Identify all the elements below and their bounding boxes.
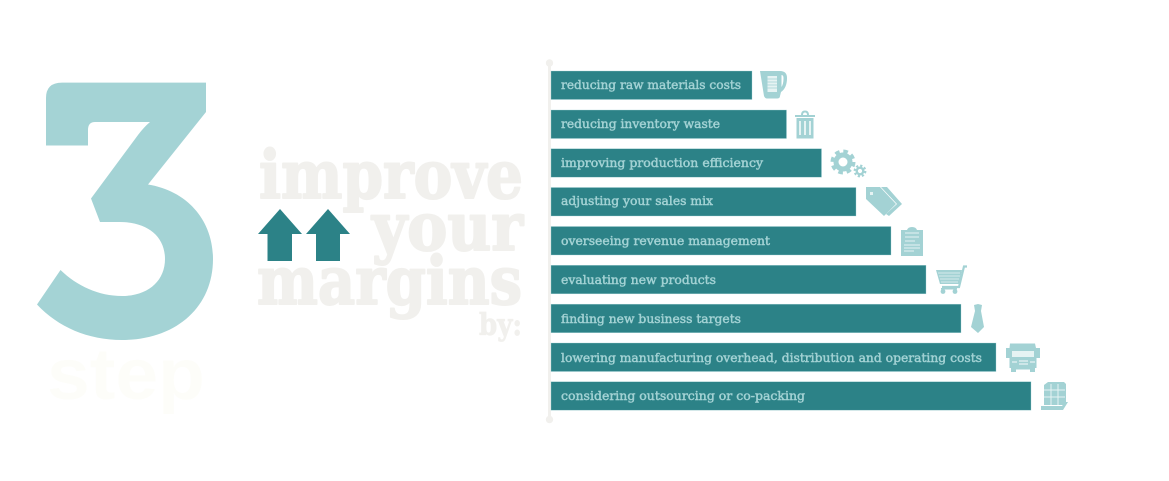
bar: adjusting your sales mix: adjusting your sales mix <box>561 194 713 208</box>
bar: considering outsourcing or co-packing <box>551 382 1031 410</box>
bar: reducing inventory waste <box>551 110 786 138</box>
heading: improve your margins by: improve <box>259 136 523 214</box>
bar: lowering manufacturing overhead, distribution and operating costs <box>551 343 996 372</box>
bar: reducing raw materials costs <box>551 71 752 100</box>
bar: overseeing revenue management <box>551 226 891 255</box>
icon: pitcher <box>760 71 787 98</box>
bar: adjusting your sales mix <box>551 188 856 216</box>
bar: lowering manufacturing overhead, distribution and operating costs: lowering manufacturing overhead, distribution and operating costs <box>561 351 982 365</box>
bar: overseeing revenue management: overseeing revenue management <box>561 234 770 248</box>
big numeral 3 <box>37 83 213 340</box>
word: step: step <box>47 335 205 415</box>
bar: evaluating new products <box>551 265 926 294</box>
timeline spine <box>546 59 553 423</box>
icon: delivery truck <box>1006 344 1040 372</box>
icon: gears <box>832 152 865 176</box>
bar: reducing inventory waste: reducing inventory waste <box>561 117 720 131</box>
icon: double up arrows <box>258 209 350 261</box>
bar: improving production efficiency: improving production efficiency <box>561 156 763 170</box>
bar: finding new business targets <box>551 304 961 333</box>
bar: evaluating new products: evaluating new products <box>561 273 716 287</box>
bar: reducing raw materials costs: reducing raw materials costs <box>561 78 741 92</box>
icon: necktie <box>971 304 984 333</box>
bar: finding new business targets: finding new business targets <box>561 312 741 326</box>
icon: clipboard <box>901 227 923 256</box>
icon: trash can <box>795 110 815 138</box>
heading: improve your margins by: your <box>371 188 524 266</box>
icon: shopping cart <box>936 266 967 294</box>
heading: improve your margins by: margins <box>257 242 522 320</box>
bar: considering outsourcing or co-packing: considering outsourcing or co-packing <box>561 389 805 403</box>
icon: pallet of boxes <box>1041 382 1068 410</box>
icon: price tags <box>866 187 902 216</box>
bar: improving production efficiency <box>551 149 822 177</box>
heading: improve your margins by: by: <box>479 308 522 343</box>
heading: improve your margins by <box>257 136 524 343</box>
